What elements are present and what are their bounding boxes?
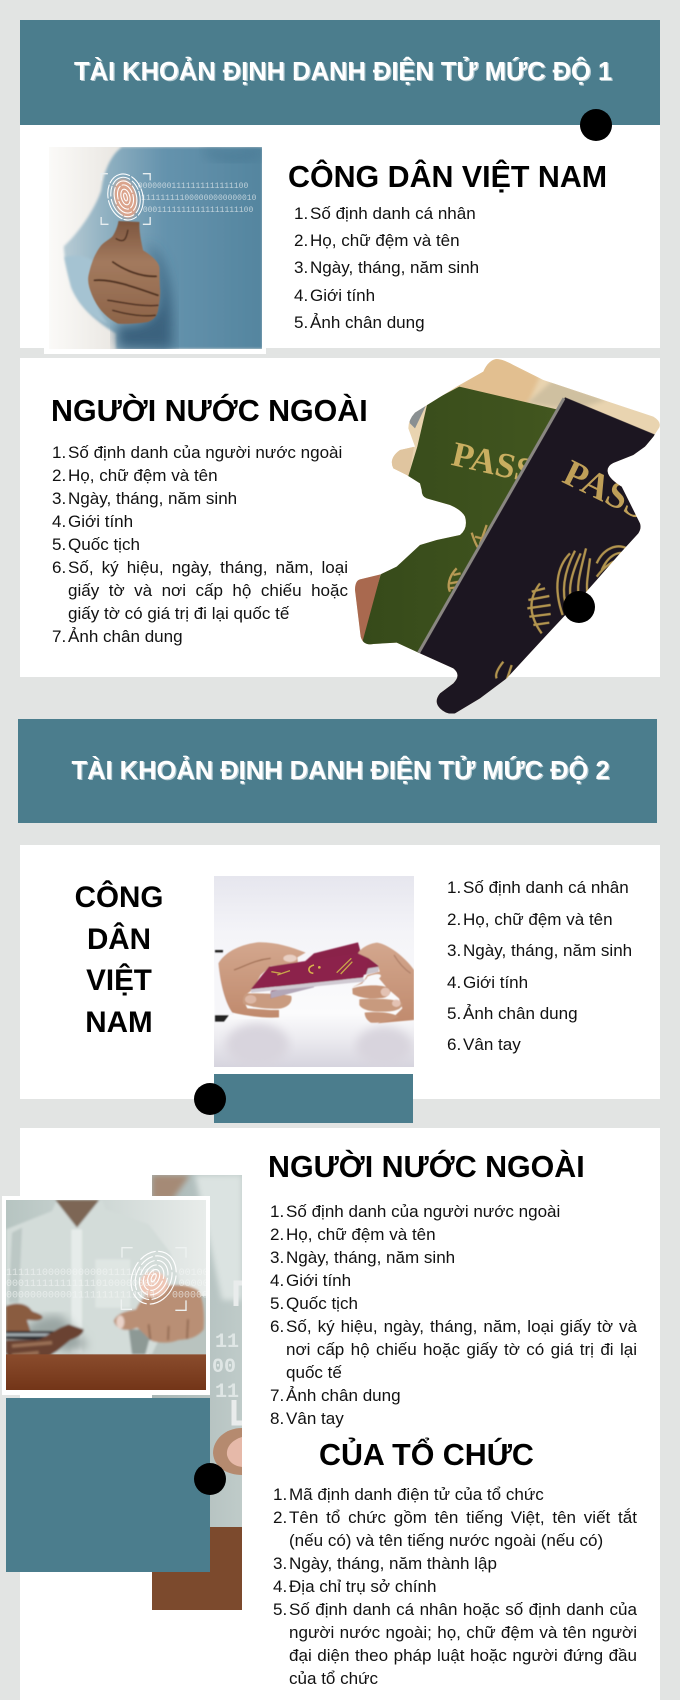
list: level 1 citizen fields [294, 204, 479, 332]
list: level 1 citizen fields: 3. [294, 258, 308, 277]
list: level 1 citizen fields: 2. [294, 231, 308, 250]
heading: foreigner, level 2: NGƯỜI NƯỚC NGOÀI [268, 1150, 585, 1184]
list: level 2 foreigner fields: 7. [270, 1386, 284, 1405]
heading: level 2 title: TÀI KHOẢN ĐỊNH DANH ĐIỆN TỬ MỨC ĐỘ 2 [72, 757, 610, 785]
list: level 2 foreigner fields: Họ, chữ đệm và tên [286, 1225, 436, 1244]
photo: hands exchanging passports [214, 876, 414, 1067]
list: organization fields: của tổ chức [289, 1669, 378, 1688]
list: level 2 citizen fields: Ngày, tháng, năm sinh [463, 941, 632, 960]
list: level 2 foreigner fields [270, 1202, 637, 1428]
list: organization fields: (nếu có) và tên tiếng nước ngoài (nếu có) [289, 1531, 603, 1550]
list: organization fields: Số định danh cá nhân hoặc số định danh của [289, 1600, 637, 1619]
heading: Vietnamese citizen, stacked: NAM [85, 1006, 153, 1039]
list: level 2 foreigner fields: 2. [270, 1225, 284, 1244]
list: organization fields: người nước ngoài; họ, chữ đệm và tên người [289, 1623, 637, 1642]
list: level 1 citizen fields: 5. [294, 313, 308, 332]
list: level 1 foreigner fields: 1. [52, 443, 66, 462]
list: organization fields: Mã định danh điện tử của tổ chức [289, 1485, 544, 1504]
list: level 2 citizen fields: Giới tính [463, 973, 528, 992]
photo: enlarged background crop of finger touching fingerprint [152, 1175, 242, 1610]
heading: Vietnamese citizen, stacked: DÂN [87, 923, 151, 956]
list: level 2 citizen fields: 3. [447, 941, 461, 960]
decorative black dot on teal block [194, 1083, 226, 1115]
panel: level 2 citizen background [20, 845, 660, 1099]
list: level 1 citizen fields: Giới tính [310, 286, 375, 305]
heading: Vietnamese citizen: CÔNG DÂN VIỆT NAM [288, 160, 607, 194]
list: level 2 citizen fields: 5. [447, 1004, 461, 1023]
list: level 1 foreigner fields: Số, ký hiệu, ngày, tháng, năm, loại [68, 558, 348, 577]
list: level 1 foreigner fields: Quốc tịch [68, 535, 140, 554]
list: level 1 citizen fields: Số định danh cá nhân [310, 204, 476, 223]
heading: Vietnamese citizen, stacked [75, 880, 163, 1039]
photo: thumb with fingerprint scan: 00011111111111111111100 [142, 206, 253, 215]
list: level 2 foreigner fields: quốc tế [286, 1363, 342, 1382]
list: level 2 foreigner fields: Số định danh của người nước ngoài [286, 1202, 560, 1221]
list: level 2 citizen fields: Vân tay [463, 1035, 521, 1054]
list: level 2 foreigner fields: nơi cấp hộ chiếu hoặc giấy tờ có giá trị đi lại [286, 1340, 637, 1359]
list: level 1 citizen fields: Ngày, tháng, năm sinh [310, 258, 479, 277]
heading: foreigner, level 1: NGƯỜI NƯỚC NGOÀI [51, 394, 368, 428]
list: organization fields: 2. [273, 1508, 287, 1527]
header band: level 1 [20, 20, 660, 125]
decorative black dot on passports [563, 591, 595, 623]
list: level 2 foreigner fields: 4. [270, 1271, 284, 1290]
photo: man with phone touching fingerprint: 0000000000011111111111111 [6, 1290, 156, 1301]
photo: man with phone touching fingerprint [6, 1200, 206, 1390]
list: level 2 foreigner fields: Số, ký hiệu, ngày, tháng, năm, loại giấy tờ và [286, 1317, 637, 1336]
list: level 2 foreigner fields: 5. [270, 1294, 284, 1313]
list: organization fields: 4. [273, 1577, 287, 1596]
heading: Vietnamese citizen, stacked: VIỆT [86, 964, 152, 997]
list: organization fields: Tên tổ chức gồm tên tiếng Việt, tên viết tắt [289, 1508, 637, 1527]
heading: organization: CỦA TỔ CHỨC [319, 1438, 534, 1472]
list: level 2 foreigner fields: Ảnh chân dung [286, 1386, 401, 1405]
list: level 1 foreigner fields: 3. [52, 489, 66, 508]
photo: enlarged background crop of finger touching fingerprint: 11 [215, 1331, 239, 1354]
photo: enlarged background crop of finger touching fingerprint: 11 [215, 1381, 239, 1404]
list: level 1 foreigner fields: 2. [52, 466, 66, 485]
list: level 1 foreigner fields: giấy tờ và nơi cấp hộ chiếu hoặc [68, 581, 348, 600]
photo: man with phone touching fingerprint: 1111110000000000011111111 [6, 1268, 156, 1279]
decorative black dot on teal block [194, 1463, 226, 1495]
heading: level 1 title: TÀI KHOẢN ĐỊNH DANH ĐIỆN TỬ MỨC ĐỘ 1 [74, 58, 612, 86]
list: level 1 citizen fields: Ảnh chân dung [310, 313, 425, 332]
heading: Vietnamese citizen, stacked: CÔNG [75, 881, 163, 914]
list: level 1 foreigner fields: 7. [52, 627, 66, 646]
list: level 1 citizen fields: Họ, chữ đệm và tên [310, 231, 460, 250]
list: organization fields: đại diện theo pháp luật hoặc người đứng đầu [289, 1646, 637, 1665]
image: passports clipped to a map shape: PASS [557, 453, 654, 528]
list: level 2 foreigner fields: 8. [270, 1409, 284, 1428]
list: organization fields: 1. [273, 1485, 287, 1504]
header band: level 2 [18, 719, 657, 823]
list: level 2 foreigner fields: Quốc tịch [286, 1294, 358, 1313]
list: level 2 foreigner fields: Giới tính [286, 1271, 351, 1290]
panel: level 1 citizen background [20, 125, 660, 348]
panel: level 2 foreigner and organization background [20, 1128, 660, 1700]
list: level 2 foreigner fields: 1. [270, 1202, 284, 1221]
list: level 2 citizen fields: Số định danh cá nhân [463, 878, 629, 897]
list: level 2 citizen fields: Họ, chữ đệm và tên [463, 910, 613, 929]
photo: man with phone touching fingerprint: 0001111111111110100000000 [6, 1279, 156, 1290]
list: level 1 foreigner fields: Họ, chữ đệm và tên [68, 466, 218, 485]
photo: enlarged background crop of finger touching fingerprint: 00 [212, 1356, 236, 1379]
list: level 2 foreigner fields: 3. [270, 1248, 284, 1267]
list: level 1 foreigner fields: Số định danh của người nước ngoài [68, 443, 342, 462]
list: level 2 foreigner fields: Ngày, tháng, năm sinh [286, 1248, 455, 1267]
list: level 1 foreigner fields: Giới tính [68, 512, 133, 531]
photo frame: fingerprint thumb [44, 147, 266, 354]
list: level 1 citizen fields: 4. [294, 286, 308, 305]
list: level 1 foreigner fields: 6. [52, 558, 66, 577]
list: level 2 citizen fields: 1. [447, 878, 461, 897]
photo frame: man with phone [2, 1196, 210, 1395]
list: level 1 foreigner fields: 4. [52, 512, 66, 531]
teal block under photo [214, 1074, 413, 1123]
list: organization fields: 5. [273, 1600, 287, 1619]
list: level 2 citizen fields: 2. [447, 910, 461, 929]
list: organization fields: 3. [273, 1554, 287, 1573]
list: level 2 citizen fields: 4. [447, 973, 461, 992]
list: level 2 foreigner fields: Vân tay [286, 1409, 344, 1428]
list: level 2 foreigner fields: 6. [270, 1317, 284, 1336]
list: organization fields [273, 1485, 637, 1688]
list: level 1 citizen fields: 1. [294, 204, 308, 223]
list: organization fields: Địa chỉ trụ sở chính [289, 1577, 436, 1596]
list: level 1 foreigner fields: 5. [52, 535, 66, 554]
list: level 2 citizen fields: 6. [447, 1035, 461, 1054]
image: passports clipped to a map shape [355, 359, 660, 714]
list: level 2 citizen fields: Ảnh chân dung [463, 1004, 578, 1023]
teal block below photo [6, 1398, 210, 1572]
list: level 1 foreigner fields: Ảnh chân dung [68, 627, 183, 646]
image: passports clipped to a map shape: PASS [448, 434, 539, 491]
list: level 1 foreigner fields: Ngày, tháng, năm sinh [68, 489, 237, 508]
list: level 1 foreigner fields: giấy tờ có giá trị đi lại quốc tế [68, 604, 289, 623]
list: level 2 citizen fields [447, 878, 632, 1054]
photo: thumb with fingerprint scan [52, 147, 262, 349]
panel: level 1 foreigner background [20, 358, 660, 677]
list: level 1 foreigner fields [52, 443, 348, 646]
list: organization fields: Ngày, tháng, năm thành lập [289, 1554, 497, 1573]
decorative black dot on header 1 [580, 109, 612, 141]
photo: thumb with fingerprint scan: 00000001111111111111100 [137, 182, 248, 191]
photo: thumb with fingerprint scan: 111111111000000000000010 [141, 194, 256, 203]
